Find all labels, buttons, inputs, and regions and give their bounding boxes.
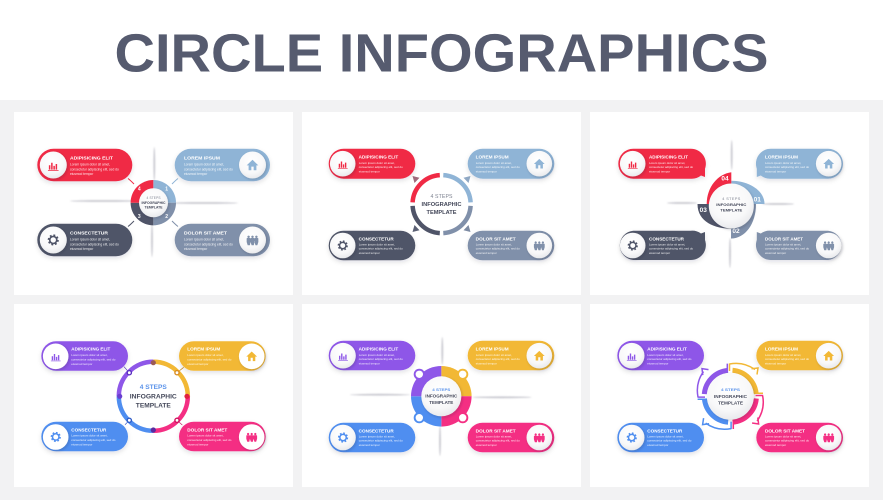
heading: CONSECTETUR [71, 428, 107, 433]
knob holes [416, 371, 466, 421]
center text: INFOGRAPHIC [142, 201, 166, 205]
heading: LOREM IPSUM [187, 347, 220, 352]
icon: chart [51, 354, 61, 361]
body text: consectetur adipiscing elit, sed do [359, 357, 403, 361]
icon: gear [339, 433, 347, 442]
body text: Lorem ipsum dolor sit amet, [765, 353, 801, 357]
body text: eiusmod tempor [70, 172, 94, 176]
title: CIRCLE INFOGRAPHICS [114, 24, 768, 84]
step: lorem ipsum [756, 341, 843, 370]
icon: people [247, 236, 258, 245]
step numbers: 03 [700, 207, 707, 214]
heading: DOLOR SIT AMET [765, 236, 803, 241]
heading: CONSECTETUR [359, 236, 394, 241]
icon: house [534, 351, 545, 360]
icon: people [246, 433, 257, 442]
step: adipisicing elit [37, 149, 132, 181]
body text: Lorem ipsum dolor sit amet, [476, 161, 512, 165]
body text: consectetur adipiscing elit, sed do [647, 439, 692, 443]
heading: DOLOR SIT AMET [476, 236, 516, 241]
center text [716, 197, 746, 212]
ring arcs [704, 370, 756, 422]
step: dolor sit amet [179, 422, 266, 451]
body text: consectetur adipiscing elit, sed do [649, 247, 693, 251]
icon: chart [338, 161, 348, 169]
body text: eiusmod tempor [649, 251, 670, 255]
heading: ADIPISICING ELIT [70, 155, 113, 160]
step: dolor sit amet [756, 423, 843, 452]
panel: red and blue notched ring [14, 112, 293, 295]
heading: LOREM IPSUM [184, 155, 220, 160]
center text: 4 STEPS [721, 388, 741, 392]
body text: Lorem ipsum dolor sit amet, [765, 242, 801, 246]
ring arcs [413, 175, 471, 233]
body text: eiusmod tempor [647, 443, 668, 447]
body text: eiusmod tempor [184, 247, 208, 251]
body text: eiusmod tempor [359, 361, 380, 365]
step numbers: 02 [732, 228, 740, 235]
center text: INFOGRAPHIC [425, 394, 457, 398]
body text: Lorem ipsum dolor sit amet, [647, 434, 684, 438]
step: dolor sit amet [468, 423, 554, 452]
step: adipisicing elit [329, 341, 415, 370]
body text: consectetur adipiscing elit, sed do [70, 242, 119, 246]
body text: consectetur adipiscing elit, sed do [649, 165, 693, 169]
center text: 4 STEPS [432, 388, 451, 392]
body text: Lorem ipsum dolor sit amet, [765, 434, 801, 438]
arrow: pink [733, 396, 763, 429]
body text: Lorem ipsum dolor sit amet, [359, 434, 395, 438]
step: dolor sit amet [756, 231, 842, 260]
step: lorem ipsum [468, 149, 554, 179]
center text [142, 196, 166, 210]
heading: DOLOR SIT AMET [184, 230, 227, 235]
body text: consectetur adipiscing elit, sed do [476, 439, 520, 443]
body text: Lorem ipsum dolor sit amet, [359, 161, 395, 165]
body text: eiusmod tempor [70, 247, 94, 251]
icon: chart [338, 353, 348, 361]
center text: INFOGRAPHIC [714, 394, 747, 399]
step: consectetur [37, 224, 132, 256]
icon: gear [338, 241, 347, 250]
step: consectetur [329, 231, 415, 260]
step: adipisicing elit [618, 149, 706, 179]
quarter sectors [698, 172, 764, 238]
body text: eiusmod tempor [71, 442, 92, 446]
body text: eiusmod tempor [649, 169, 670, 173]
shadow spokes [350, 337, 532, 456]
step: adipisicing elit [329, 149, 415, 179]
heading: LOREM IPSUM [476, 154, 509, 159]
body text: eiusmod tempor [476, 361, 497, 365]
panel: colorful quarters with knobs [302, 304, 581, 487]
body text: eiusmod tempor [359, 251, 380, 255]
center circle [421, 376, 461, 416]
body text: eiusmod tempor [359, 169, 380, 173]
center text [130, 384, 177, 410]
body text: consectetur adipiscing elit, sed do [765, 247, 809, 251]
step: consectetur [41, 422, 128, 451]
icon: gear [628, 241, 637, 250]
cardinal dots [117, 360, 190, 433]
icon: chart [628, 161, 638, 169]
body text: consectetur adipiscing elit, sed do [476, 357, 520, 361]
panel: colorful dotted ring [14, 304, 293, 487]
icon: chart [627, 353, 637, 361]
body text: consectetur adipiscing elit, sed do [184, 242, 233, 246]
panel: segmented arrow ring [302, 112, 581, 295]
body text: consectetur adipiscing elit, sed do [184, 167, 233, 171]
center text: TEMPLATE [426, 210, 457, 216]
icon: house [823, 159, 834, 168]
center text: TEMPLATE [429, 400, 454, 405]
center text: INFOGRAPHIC [130, 394, 177, 400]
heading: CONSECTETUR [649, 236, 685, 241]
icon: gear [51, 433, 60, 441]
heading: LOREM IPSUM [765, 154, 798, 159]
step numbers: 3 [138, 214, 141, 220]
body text: eiusmod tempor [359, 443, 380, 447]
body text: Lorem ipsum dolor sit amet, [70, 162, 110, 166]
body text: Lorem ipsum dolor sit amet, [476, 242, 512, 246]
ring arcs [119, 362, 188, 431]
step: lorem ipsum [175, 149, 270, 181]
icon: chart [48, 163, 59, 171]
body text: eiusmod tempor [765, 361, 786, 365]
body text: eiusmod tempor [476, 251, 497, 255]
icon: gear [48, 235, 58, 245]
body text: Lorem ipsum dolor sit amet, [476, 434, 512, 438]
icon: people [823, 433, 834, 442]
body text: consectetur adipiscing elit, sed do [70, 167, 119, 171]
heading: CONSECTETUR [70, 230, 109, 235]
center circle [709, 184, 754, 228]
body text: consectetur adipiscing elit, sed do [359, 247, 403, 251]
panel: numbered spiral quarters [590, 112, 869, 295]
icon: house [246, 352, 257, 361]
body text: eiusmod tempor [647, 361, 668, 365]
center text: 4 STEPS [140, 384, 167, 391]
arrow: blue [698, 399, 731, 429]
body text: eiusmod tempor [476, 169, 497, 173]
icon: house [823, 351, 834, 360]
body text: Lorem ipsum dolor sit amet, [187, 353, 224, 357]
body text: eiusmod tempor [184, 172, 208, 176]
body text: consectetur adipiscing elit, sed do [476, 247, 520, 251]
body text: Lorem ipsum dolor sit amet, [476, 353, 512, 357]
arrowheads [412, 176, 470, 232]
center text: TEMPLATE [718, 400, 743, 405]
body text: consectetur adipiscing elit, sed do [71, 438, 116, 442]
body text: eiusmod tempor [765, 251, 786, 255]
heading: ADIPISICING ELIT [647, 346, 687, 351]
step: adipisicing elit [41, 341, 128, 371]
body text: Lorem ipsum dolor sit amet, [765, 161, 801, 165]
center text [714, 388, 747, 405]
center text [425, 388, 457, 405]
step numbers [700, 176, 761, 235]
body text: eiusmod tempor [476, 443, 497, 447]
body text: eiusmod tempor [765, 443, 786, 447]
icon: house [247, 160, 258, 170]
body text: consectetur adipiscing elit, sed do [765, 357, 809, 361]
body text: Lorem ipsum dolor sit amet, [359, 353, 395, 357]
body text: consectetur adipiscing elit, sed do [187, 438, 232, 442]
heading: CONSECTETUR [359, 428, 394, 433]
step: lorem ipsum [468, 341, 554, 370]
heading: DOLOR SIT AMET [765, 428, 805, 433]
arrow: yellow [730, 363, 763, 393]
heading: DOLOR SIT AMET [187, 428, 227, 433]
icon: gear [627, 433, 636, 442]
body text: Lorem ipsum dolor sit amet, [71, 434, 108, 438]
heading: LOREM IPSUM [765, 346, 798, 351]
heading: ADIPISICING ELIT [649, 154, 688, 159]
body text: Lorem ipsum dolor sit amet, [359, 242, 395, 246]
body text: consectetur adipiscing elit, sed do [765, 165, 809, 169]
center text: TEMPLATE [720, 208, 743, 212]
body text: consectetur adipiscing elit, sed do [476, 165, 520, 169]
center text: TEMPLATE [136, 403, 171, 410]
center text [422, 194, 462, 216]
body text: Lorem ipsum dolor sit amet, [184, 238, 224, 242]
ring sectors [131, 180, 176, 225]
heading: ADIPISICING ELIT [359, 346, 398, 351]
center text: INFOGRAPHIC [716, 202, 746, 207]
body text: Lorem ipsum dolor sit amet, [649, 242, 685, 246]
body text: Lorem ipsum dolor sit amet, [70, 238, 110, 242]
body text: eiusmod tempor [765, 169, 786, 173]
body text: consectetur adipiscing elit, sed do [187, 357, 232, 361]
step numbers: 1 [165, 186, 168, 192]
step: consectetur [620, 231, 706, 260]
arrow: purple [697, 364, 727, 397]
center text: 4 STEPS [146, 196, 160, 200]
shadow spokes [667, 140, 794, 268]
step: consectetur [329, 423, 415, 452]
center text: 4 STEPS [430, 194, 453, 200]
heading: DOLOR SIT AMET [476, 428, 516, 433]
body text: consectetur adipiscing elit, sed do [647, 357, 692, 361]
step: lorem ipsum [756, 149, 843, 179]
center text: TEMPLATE [144, 206, 163, 210]
icon: people [823, 241, 834, 250]
step: dolor sit amet [175, 224, 270, 256]
body text: Lorem ipsum dolor sit amet, [187, 434, 224, 438]
body text: eiusmod tempor [187, 362, 208, 366]
step: consectetur [617, 423, 704, 452]
step numbers: 04 [721, 176, 729, 183]
panel: colorful ring with outward arrows [590, 304, 869, 487]
step numbers [138, 186, 168, 220]
body text: Lorem ipsum dolor sit amet, [71, 353, 108, 357]
center text: INFOGRAPHIC [422, 202, 462, 208]
center circle [139, 188, 168, 217]
quarter sectors [411, 366, 472, 427]
center circle [707, 373, 754, 419]
step numbers: 01 [754, 197, 761, 204]
icon: people [534, 433, 545, 442]
body text: eiusmod tempor [187, 442, 208, 446]
connectors [124, 367, 184, 425]
body text: consectetur adipiscing elit, sed do [765, 439, 809, 443]
diagonal ring dots [127, 371, 179, 422]
heading: CONSECTETUR [647, 428, 683, 433]
step: lorem ipsum [179, 341, 266, 371]
body text: Lorem ipsum dolor sit amet, [184, 162, 224, 166]
icon: people [534, 241, 545, 250]
heading: LOREM IPSUM [476, 346, 509, 351]
connectors [128, 178, 178, 226]
step numbers: 4 [138, 186, 141, 192]
center text: 4 STEPS [722, 197, 741, 201]
body text: Lorem ipsum dolor sit amet, [647, 353, 684, 357]
icon: house [534, 159, 545, 168]
body text: consectetur adipiscing elit, sed do [71, 357, 116, 361]
step numbers: 2 [165, 214, 168, 220]
body text: consectetur adipiscing elit, sed do [359, 439, 403, 443]
heading: ADIPISICING ELIT [359, 154, 398, 159]
shadow spokes [70, 147, 238, 257]
body text: consectetur adipiscing elit, sed do [359, 165, 403, 169]
body text: Lorem ipsum dolor sit amet, [649, 161, 685, 165]
step: dolor sit amet [468, 231, 554, 260]
heading: ADIPISICING ELIT [71, 347, 110, 352]
step: adipisicing elit [617, 341, 704, 370]
body text: eiusmod tempor [71, 362, 92, 366]
